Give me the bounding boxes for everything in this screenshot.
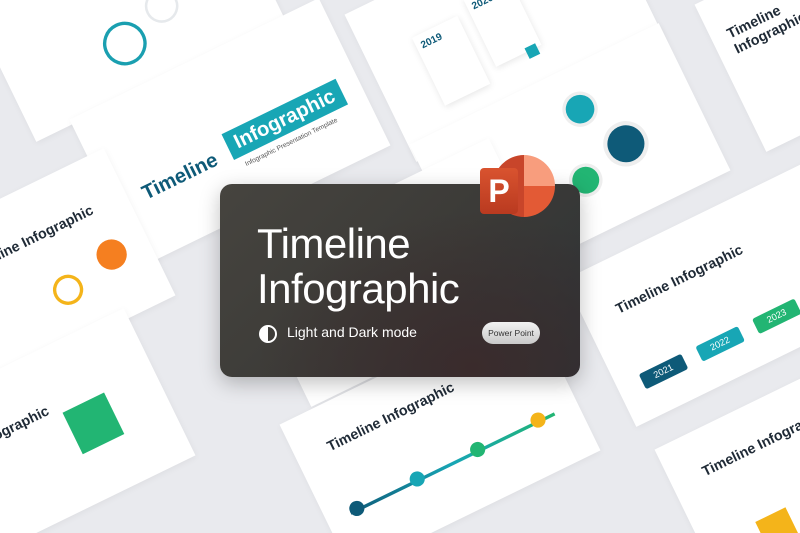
icon: powerpoint logo xyxy=(480,155,555,217)
text: mode: Light and Dark mode xyxy=(287,324,417,340)
slide: title slide: Timeline xyxy=(138,148,222,205)
slide: 2021-2024: 2021 xyxy=(652,363,675,381)
slide: bottom-right orange xyxy=(655,328,800,533)
slide: title slide: Infographic xyxy=(230,85,339,153)
slide: trophy: Timeline xyxy=(471,188,530,227)
slide: center hidden xyxy=(240,138,560,407)
heading: Timeline xyxy=(257,220,410,267)
slide: title slide: Infographic Presentation Template xyxy=(244,116,339,168)
badge: Power Point xyxy=(488,328,534,338)
slide: top-right corner xyxy=(695,0,800,152)
slide: 2021-2024: 2023 xyxy=(765,307,788,325)
dark card xyxy=(220,184,580,377)
slide: 2019 2020: 2019 xyxy=(419,30,444,51)
slide: bottom timeline xyxy=(280,303,600,533)
slide: bottom-left green xyxy=(0,308,195,533)
slide: title slide xyxy=(70,0,390,267)
slide: top-right corner: Timeline xyxy=(724,2,783,42)
heading xyxy=(257,220,459,312)
slide: 2021-2024: 2022 xyxy=(709,335,732,353)
slide: bottom timeline: Timeline Infographic xyxy=(324,379,457,454)
slide: 2021-2024 xyxy=(565,158,800,427)
slide: top-left curved timeline xyxy=(0,0,285,142)
badge xyxy=(482,322,540,344)
slide: 2021-2024: Timeline Infographic xyxy=(613,242,745,317)
slide: 2019 2020 xyxy=(345,0,665,162)
icon: powerpoint logo: P xyxy=(488,173,510,209)
slide: left yellow circles xyxy=(0,148,175,417)
heading: Infographic xyxy=(257,265,459,312)
slide: trophy: Infographic xyxy=(478,194,555,242)
icon: half circle xyxy=(259,325,277,343)
slide: trophy xyxy=(410,23,730,292)
